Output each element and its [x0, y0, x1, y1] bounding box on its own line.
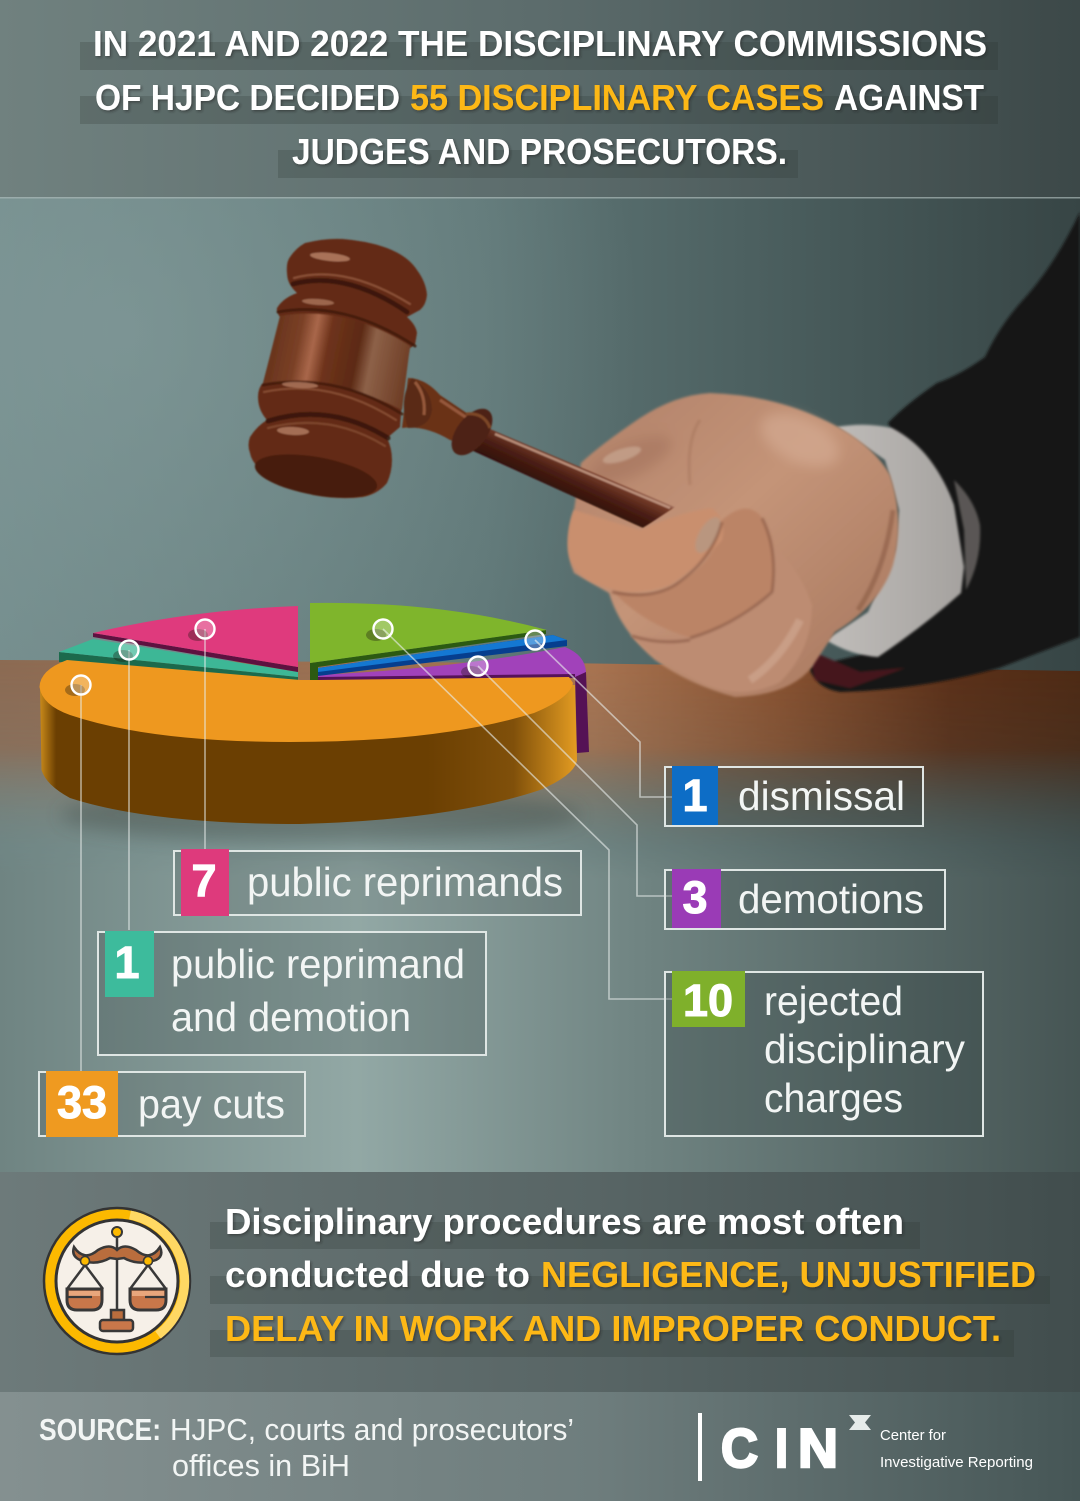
title: OF HJPC DECIDED [95, 77, 400, 118]
callout: demotions [665, 869, 945, 929]
title: 55 DISCIPLINARY CASES [410, 77, 824, 118]
teal slice [59, 639, 298, 680]
callout: pay cuts: 33 [57, 1077, 107, 1128]
CIN logo: N [798, 1417, 838, 1479]
conclusion highlight bars [210, 1222, 1050, 1357]
conclusion text: conducted due to [225, 1254, 530, 1295]
gavel [248, 239, 675, 528]
callout: pay cuts: pay cuts [138, 1081, 285, 1127]
callout: rejected disciplinary charges: rejected [764, 978, 903, 1024]
CIN logo [698, 1413, 1033, 1481]
hand: back of hand [568, 393, 898, 697]
nail [690, 513, 726, 557]
callout: public reprimand and demotion: public reprimand [171, 941, 465, 987]
title highlight bars [80, 42, 998, 178]
icon: logo mark [849, 1415, 871, 1430]
CIN logo: C [721, 1417, 758, 1479]
conclusion band [0, 1172, 1080, 1392]
title: IN 2021 AND 2022 THE DISCIPLINARY COMMISSIONS [93, 23, 987, 64]
green slice [310, 603, 547, 680]
CIN logo: Center for [880, 1427, 946, 1444]
source: HJPC, courts and prosecutors’ [170, 1412, 574, 1447]
title: JUDGES AND PROSECUTORS. [292, 131, 787, 172]
callout: public reprimands: 7 [191, 855, 217, 906]
callout: public reprimand and demotion [98, 931, 486, 1055]
source: SOURCE: [39, 1412, 161, 1447]
callout: rejected disciplinary charges: 10 [683, 975, 733, 1026]
callout: demotions: demotions [738, 876, 924, 922]
leader lines [81, 629, 672, 1075]
conclusion text: Disciplinary procedures are most often [225, 1201, 904, 1242]
callout: dismissal: dismissal [738, 773, 905, 819]
CIN logo: Investigative Reporting [880, 1454, 1033, 1471]
shirt cuff [826, 425, 980, 657]
callout: public reprimand and demotion: and demotion [171, 994, 411, 1040]
callout: rejected disciplinary charges: charges [764, 1075, 903, 1121]
callout: rejected disciplinary charges: disciplinary [764, 1026, 965, 1072]
table surface [0, 660, 1080, 822]
orange slice [40, 660, 577, 824]
callout: dismissal [665, 766, 923, 826]
blue slice [318, 635, 567, 676]
footer band [0, 1392, 1080, 1501]
title: AGAINST [834, 77, 984, 118]
gavel grooves and highlights [263, 274, 415, 446]
lower background [0, 750, 1080, 1175]
jacket sleeve [809, 212, 1080, 692]
source: offices in BiH [172, 1448, 350, 1483]
pie shadow [60, 787, 580, 843]
conclusion text: DELAY IN WORK AND IMPROPER CONDUCT. [225, 1308, 1001, 1349]
conclusion text: NEGLIGENCE, UNJUSTIFIED [541, 1254, 1036, 1295]
gavel handle [402, 378, 675, 528]
gavel face [252, 447, 380, 505]
callout: rejected disciplinary charges [665, 971, 983, 1136]
purple slice [318, 647, 589, 753]
source [39, 1412, 574, 1483]
hand: fingers [568, 508, 812, 692]
3D pie chart [40, 603, 589, 843]
title [93, 23, 987, 172]
conclusion text [225, 1201, 1036, 1349]
pie markers [72, 620, 544, 694]
callout: public reprimands [174, 849, 581, 916]
marker shadows [65, 629, 481, 696]
thumb nail [601, 443, 643, 467]
gavel barrel [263, 314, 410, 410]
CIN logo: I [775, 1417, 788, 1479]
icon: scales of justice [44, 1208, 190, 1354]
callout: pay cuts [39, 1071, 305, 1137]
top heading band [0, 0, 1080, 198]
callout: dismissal: 1 [682, 770, 708, 821]
callout: public reprimand and demotion: 1 [114, 937, 140, 988]
callout: demotions: 3 [682, 872, 708, 923]
gavel head silhouette [248, 239, 427, 498]
pink slice [93, 606, 298, 672]
callout: public reprimands: public reprimands [247, 859, 563, 905]
